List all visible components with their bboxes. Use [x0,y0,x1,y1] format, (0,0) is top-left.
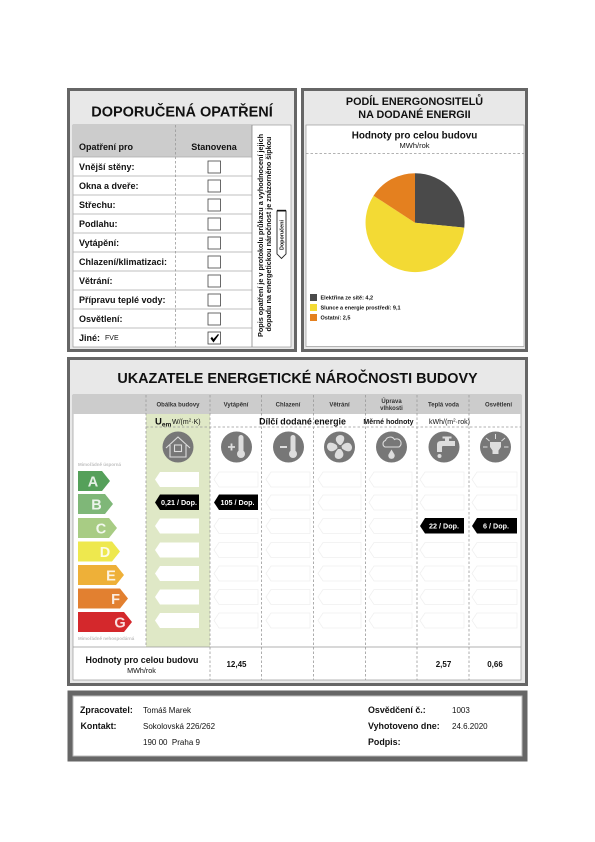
arrow: doporučení tag [277,210,286,258]
subheading: hodnoty pro celou budovu: Hodnoty pro celou budovu [352,130,477,142]
unit row: Měrné hodnoty [363,419,414,426]
processor details: 190 00 Praha 9 [143,738,200,747]
table header row: Osvětlení [485,402,512,408]
row: hodnoty pro celou budovu: Hodnoty pro celou budovu [86,655,198,665]
unit row: kWh/(m [429,419,453,426]
unit row: 2 [189,418,192,422]
legend: Elektřina ze sítě: 4,2 [320,296,373,302]
value tag: lighting 6 [472,518,517,534]
class B: B [91,498,102,514]
checkboxes [208,161,220,344]
value tag: hot water 22: 22 / Dop. [429,522,459,530]
row: hodnoty pro celou budovu: 12,45 [226,660,247,669]
certificate details: Vyhotoveno dne: [368,721,440,731]
icon: light bulb [480,432,511,462]
processor details: Tomáš Marek [143,706,192,715]
pie chart [366,173,465,272]
processor details: Zpracovatel: [80,705,133,715]
energy class scale: Mimořádně nehospodárná [78,636,135,641]
table header row: Opatření pro [79,142,134,152]
legend: Slunce a energie prostředí: 9,1 [320,306,401,312]
table header row: Teplá voda [428,402,460,408]
icon: heating thermometer [221,432,252,462]
unit row: Dílčí dodané energie [259,416,346,426]
side note: Popis opatření je v protokolu průkazu a vyhodnocení jejich [256,134,265,337]
table header row: Vytápění [224,402,249,408]
table rows [73,125,252,347]
subheading: hodnoty pro celou budovu [352,130,477,150]
row: hodnoty pro celou budovu: 2,57 [436,660,452,669]
table rows: Větrání: [79,276,113,286]
table header row: vlhkosti [380,406,403,412]
side note [256,134,286,337]
processor details [80,705,216,747]
table header row: Obálka budovy [156,402,200,408]
class A: A [88,474,99,490]
table header row [73,125,252,157]
processor details: Sokolovská 226/262 [143,722,216,731]
empty rating tags [214,472,517,628]
class F [78,588,128,608]
certificate details: Osvědčení č.: [368,705,426,715]
table rows: Vnější stěny: [79,162,135,172]
class C: C [96,522,107,538]
icon: water tap [428,432,460,462]
class G: G [114,616,126,632]
energy class scale [78,462,135,641]
panel: podíl energonositelů [302,90,526,350]
class D: D [100,545,110,561]
heading: podíl energonositelů: PODÍL ENERGONOSITELŮ [346,94,483,108]
table rows: FVE [105,335,119,342]
heading: podíl energonositelů: NA DODANÉ ENERGII [358,108,471,121]
row: hodnoty pro celou budovu: 0,66 [487,660,503,669]
table header row: Úprava [381,398,402,405]
table header row: Větrání [329,402,350,408]
value tag: heating 105 [214,494,258,510]
certificate details [368,705,488,747]
icon: humidity cloud [376,432,407,462]
panel: doporučená opatření [68,90,296,350]
class B [78,494,113,514]
unit row: 2 [453,418,456,422]
unit row: ·K) [191,419,201,426]
icon: fan [324,432,355,462]
class G [78,612,132,632]
unit row: U [155,416,162,428]
unit row [155,416,470,428]
table header row: Chlazení [276,402,301,408]
row: hodnoty pro celou budovu: MWh/rok [127,666,156,675]
unit row: W/(m [172,419,189,426]
energy class scale: Mimořádně úsporná [78,462,122,467]
heading: doporučená opatření: DOPORUČENÁ OPATŘENÍ [91,102,274,120]
heading: podíl energonositelů [346,94,483,121]
unit row: em [162,422,171,428]
table rows: Jiné: [79,333,100,343]
table rows: Střechu: [79,200,116,210]
green envelope column [146,414,210,647]
certificate details: Podpis: [368,737,401,747]
legend: Ostatní: 2,5 [320,316,350,322]
unit row: ·rok) [456,419,470,426]
certificate details: 1003 [452,706,470,715]
icon: house [162,432,194,462]
envelope column tags [155,472,199,628]
class D [78,542,120,562]
row: hodnoty pro celou budovu [86,655,503,675]
value tag: envelope 0,21 [155,494,199,510]
subheading: hodnoty pro celou budovu: MWh/rok [400,141,430,150]
panel: footer contact details [70,693,525,759]
class F: F [111,592,120,608]
value tag: envelope 0,21: 0,21 / Dop. [161,498,197,507]
icon: cooling thermometer [273,432,304,462]
grid lines [73,395,521,680]
table rows: Okna a dveře: [79,181,139,191]
table rows: Osvětlení: [79,314,123,324]
heading: ukazatele: UKAZATELE ENERGETICKÉ NÁROČNOSTI BUDOVY [117,369,478,387]
class C [78,518,117,538]
arrow: doporučení tag: Doporučení [280,220,286,250]
class A [78,471,110,491]
value tag: lighting 6: 6 / Dop. [483,522,509,530]
table header row [73,395,521,414]
table rows: Přípravu teplé vody: [79,295,166,305]
class E [78,565,124,585]
processor details: Kontakt: [80,721,117,731]
value tag: hot water 22 [420,518,464,534]
table rows: Chlazení/klimatizaci: [79,257,167,267]
legend [310,294,401,322]
panel: ukazatele energetické náročnosti [68,358,526,684]
value tag: heating 105: 105 / Dop. [221,498,254,507]
certificate details: 24.6.2020 [452,722,488,731]
table header row: Stanovena [191,142,238,152]
side note: dopadu na energetickou náročnost je znázorněno šipkou [264,137,273,332]
table rows: Podlahu: [79,219,118,229]
table rows: Vytápění: [79,238,119,248]
class E: E [106,568,116,584]
